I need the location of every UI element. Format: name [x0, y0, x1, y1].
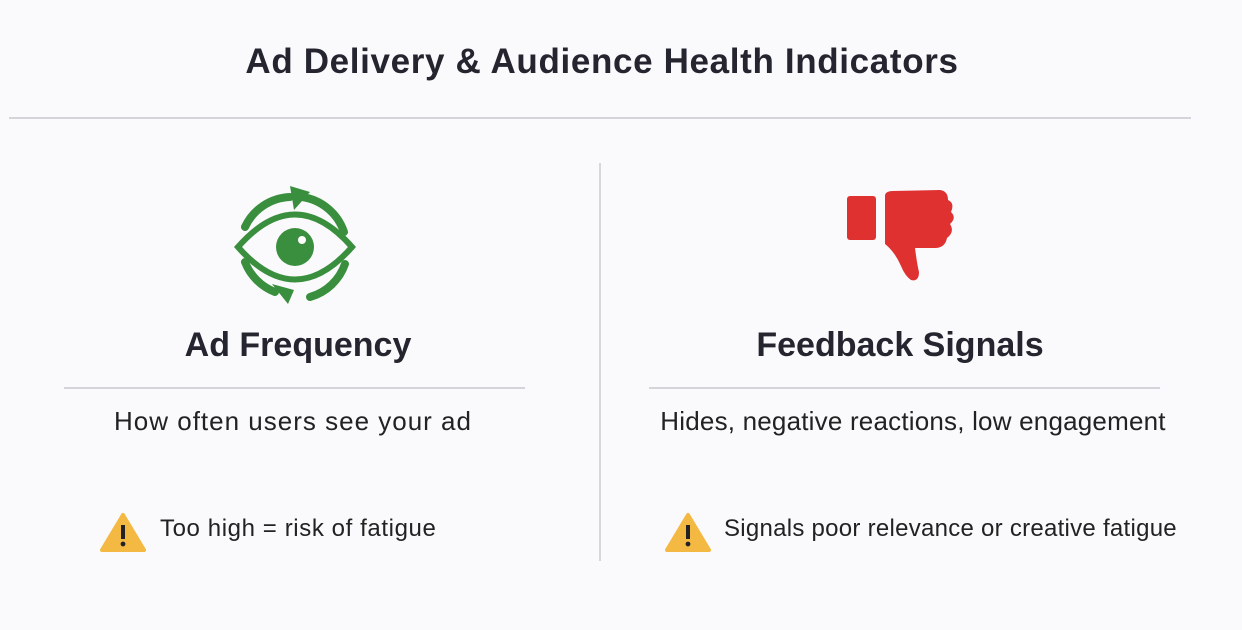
icon: thumbs down	[847, 190, 954, 280]
warning	[665, 512, 1177, 552]
warning: Signals poor relevance or creative fatigue	[724, 515, 1177, 542]
heading: Ad Frequency	[185, 326, 411, 364]
icon: eye with cycle arrows	[234, 186, 356, 304]
title: Ad Delivery & Audience Health Indicators	[245, 42, 959, 81]
panel: feedback signals	[649, 190, 1177, 552]
heading: Feedback Signals	[756, 326, 1044, 364]
panel: ad frequency	[64, 186, 525, 552]
description: Hides, negative reactions, low engagement	[660, 406, 1166, 436]
warning	[100, 512, 436, 552]
description: How often users see your ad	[114, 406, 472, 436]
icon: warning	[100, 512, 146, 552]
icon: warning	[665, 512, 711, 552]
warning: Too high = risk of fatigue	[160, 515, 436, 542]
